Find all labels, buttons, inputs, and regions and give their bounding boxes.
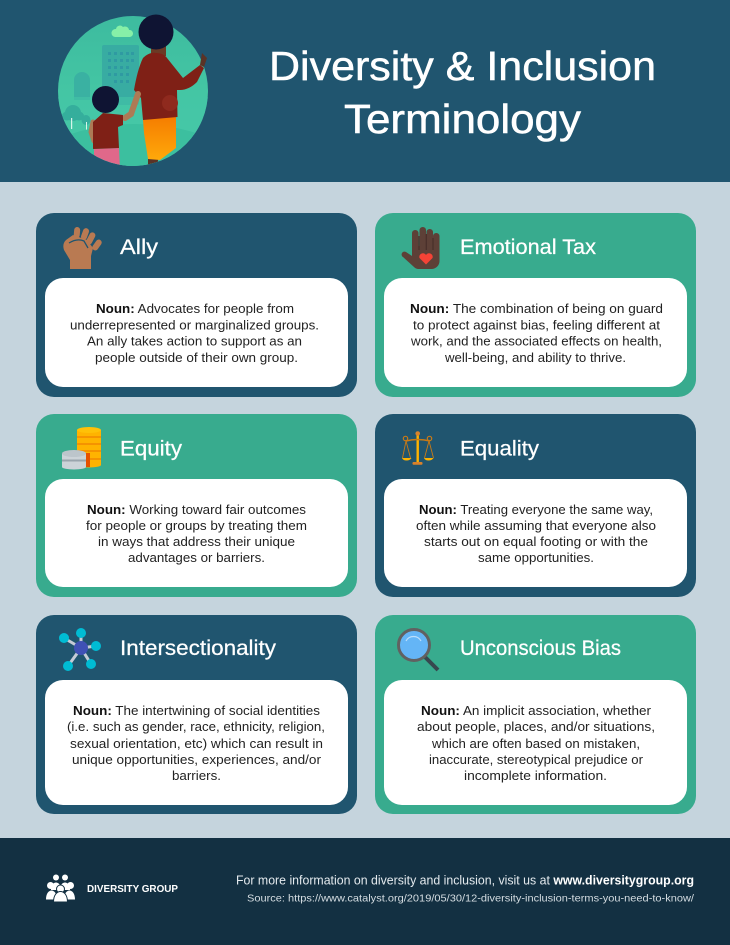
more information line: For more information on diversity and inclusion, visit us at www.diversitygroup.org bbox=[236, 874, 694, 888]
definition text bbox=[417, 703, 655, 783]
heading: Intersectionality bbox=[120, 637, 277, 660]
definition text: An ally takes action to support as an bbox=[87, 334, 302, 348]
header band bbox=[0, 0, 730, 182]
panel: Intersectionality bbox=[36, 615, 357, 814]
definition text bbox=[86, 502, 307, 565]
heading: Ally bbox=[120, 236, 159, 259]
definition text: same opportunities. bbox=[478, 550, 594, 565]
icon: raised fist bbox=[63, 227, 103, 269]
definition text: underrepresented or marginalized groups. bbox=[70, 318, 319, 332]
definition text: Noun: The combination of being on guard bbox=[410, 301, 663, 316]
definition text bbox=[67, 703, 325, 783]
definition text: people outside of their own group. bbox=[95, 350, 298, 365]
definition text: (i.e. such as gender, race, ethnicity, religion, bbox=[67, 719, 325, 734]
footer band bbox=[0, 838, 730, 945]
definition text: barriers. bbox=[172, 768, 221, 783]
definition card bbox=[384, 479, 687, 587]
definition text: Noun: Advocates for people from bbox=[96, 301, 294, 316]
title bbox=[269, 43, 656, 142]
title: Diversity & Inclusion bbox=[269, 43, 656, 89]
definition text: sexual orientation, etc) which can result in bbox=[70, 736, 323, 751]
definition text: starts out on equal footing or with the bbox=[424, 534, 648, 549]
definition text bbox=[70, 301, 319, 365]
definition text: about people, places, and/or situations, bbox=[417, 719, 655, 734]
title: Terminology bbox=[344, 96, 582, 142]
definition card bbox=[45, 479, 348, 587]
icon: balance scale bbox=[402, 431, 434, 465]
definition text: well-being, and ability to thrive. bbox=[444, 350, 626, 365]
definition text bbox=[410, 301, 663, 365]
definition card bbox=[384, 680, 687, 805]
heading: Equality bbox=[460, 438, 540, 460]
brand name: DIVERSITY GROUP bbox=[87, 884, 178, 895]
icon: network nodes bbox=[59, 628, 101, 671]
panel: Unconscious Bias bbox=[375, 615, 696, 814]
definition text: advantages or barriers. bbox=[128, 550, 265, 565]
definition text: to protect against bias, feeling different at bbox=[413, 318, 660, 332]
definition text: Noun: Working toward fair outcomes bbox=[87, 502, 306, 517]
definition text: Noun: Treating everyone the same way, bbox=[419, 502, 653, 517]
icon: hand with heart bbox=[402, 227, 440, 269]
panel: Equality bbox=[375, 414, 696, 597]
definition text: for people or groups by treating them bbox=[86, 518, 307, 533]
heading: Unconscious Bias bbox=[460, 637, 621, 660]
heading: Emotional Tax bbox=[460, 236, 597, 259]
definition text: in ways that address their unique bbox=[98, 534, 295, 549]
definition text: inaccurate, stereotypical prejudice or bbox=[429, 752, 644, 767]
panel: Emotional Tax bbox=[375, 213, 696, 397]
definition text: often while assuming that everyone also bbox=[416, 518, 656, 533]
definition card bbox=[45, 680, 348, 805]
icon: group of people bbox=[46, 874, 75, 902]
icon: coin stacks bbox=[62, 427, 101, 470]
panel: Equity bbox=[36, 414, 357, 597]
definition text: work, and the associated effects on health, bbox=[410, 334, 662, 348]
source line: Source: https://www.catalyst.org/2019/05/30/12-diversity-inclusion-terms-you-need-to-know/ bbox=[247, 892, 694, 904]
definition text: which are often based on mistaken, bbox=[431, 736, 640, 751]
definition text: Noun: An implicit association, whether bbox=[421, 703, 652, 718]
definition text: unique opportunities, experiences, and/or bbox=[72, 752, 322, 767]
definition text bbox=[416, 502, 656, 565]
definition card bbox=[384, 278, 687, 387]
heading: Equity bbox=[120, 438, 183, 460]
icon: magnifying glass bbox=[398, 630, 438, 670]
definition text: Noun: The intertwining of social identities bbox=[73, 703, 320, 718]
panel: Ally bbox=[36, 213, 357, 397]
illustration: adult and child holding hands bbox=[58, 14, 208, 166]
definition text: incomplete information. bbox=[464, 768, 607, 783]
definition card bbox=[45, 278, 348, 387]
